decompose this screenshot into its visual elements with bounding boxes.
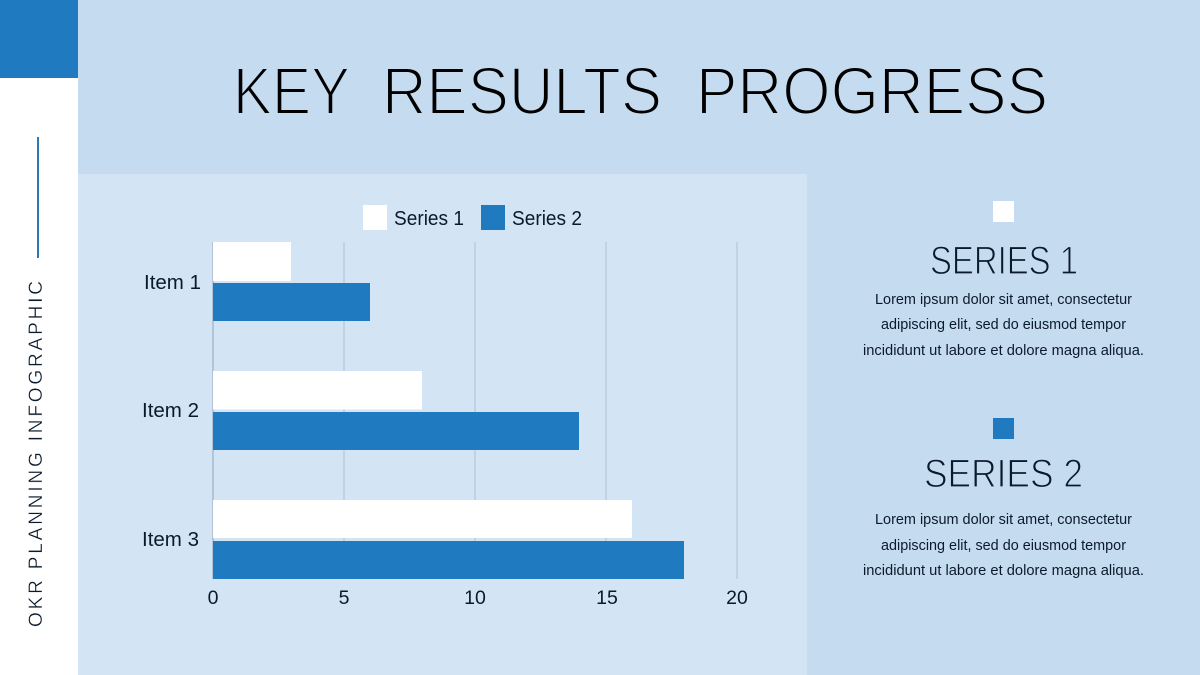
value axis labels: 0 <box>208 587 219 609</box>
title <box>233 54 1048 129</box>
bars: item 2 <box>213 371 579 450</box>
icon: white square <box>993 201 1014 222</box>
body text: series 2: adipiscing elit, sed do eiusmod tempor <box>881 538 1126 554</box>
panel: series 2 description <box>863 418 1144 579</box>
value axis labels: 15 <box>596 587 618 609</box>
bars: item 1 <box>213 242 370 321</box>
chart legend: Series 2 <box>512 208 582 230</box>
body text: series 2 <box>863 512 1144 579</box>
category labels: Item 3 <box>142 529 199 551</box>
title: PROGRESS <box>696 54 1048 129</box>
chart legend <box>363 205 582 230</box>
body text: series 1: incididunt ut labore et dolore magna aliqua. <box>863 343 1144 359</box>
body text: series 1: adipiscing elit, sed do eiusmod tempor <box>881 317 1126 333</box>
icon: blue square <box>993 418 1014 439</box>
body text: series 2: Lorem ipsum dolor sit amet, consectetur <box>875 512 1132 528</box>
panel: chart <box>78 174 807 675</box>
bar chart <box>142 242 748 609</box>
body text: series 2: incididunt ut labore et dolore magna aliqua. <box>863 563 1144 579</box>
sidebar vertical label: OKR PLANNING INFOGRAPHIC <box>26 281 47 627</box>
value axis labels: 5 <box>339 587 350 609</box>
body text: series 1 <box>863 292 1144 359</box>
bars: item 3 <box>213 500 684 579</box>
category labels: Item 2 <box>142 400 199 422</box>
sidebar <box>0 0 78 675</box>
panel: series 1 description <box>863 201 1144 359</box>
body text: series 1: Lorem ipsum dolor sit amet, consectetur <box>875 292 1132 308</box>
category labels <box>142 272 201 551</box>
value axis labels: 10 <box>464 587 486 609</box>
chart legend: Series 1 <box>394 208 464 230</box>
sidebar corner block <box>0 0 78 78</box>
title: KEY <box>233 54 350 129</box>
category labels: Item 1 <box>144 272 201 294</box>
value axis labels: 20 <box>726 587 748 609</box>
value axis labels <box>208 587 748 609</box>
title: RESULTS <box>382 54 662 129</box>
sidebar accent line <box>37 137 39 258</box>
heading: series 1: SERIES 1 <box>930 239 1078 283</box>
heading: series 2: SERIES 2 <box>924 452 1083 496</box>
